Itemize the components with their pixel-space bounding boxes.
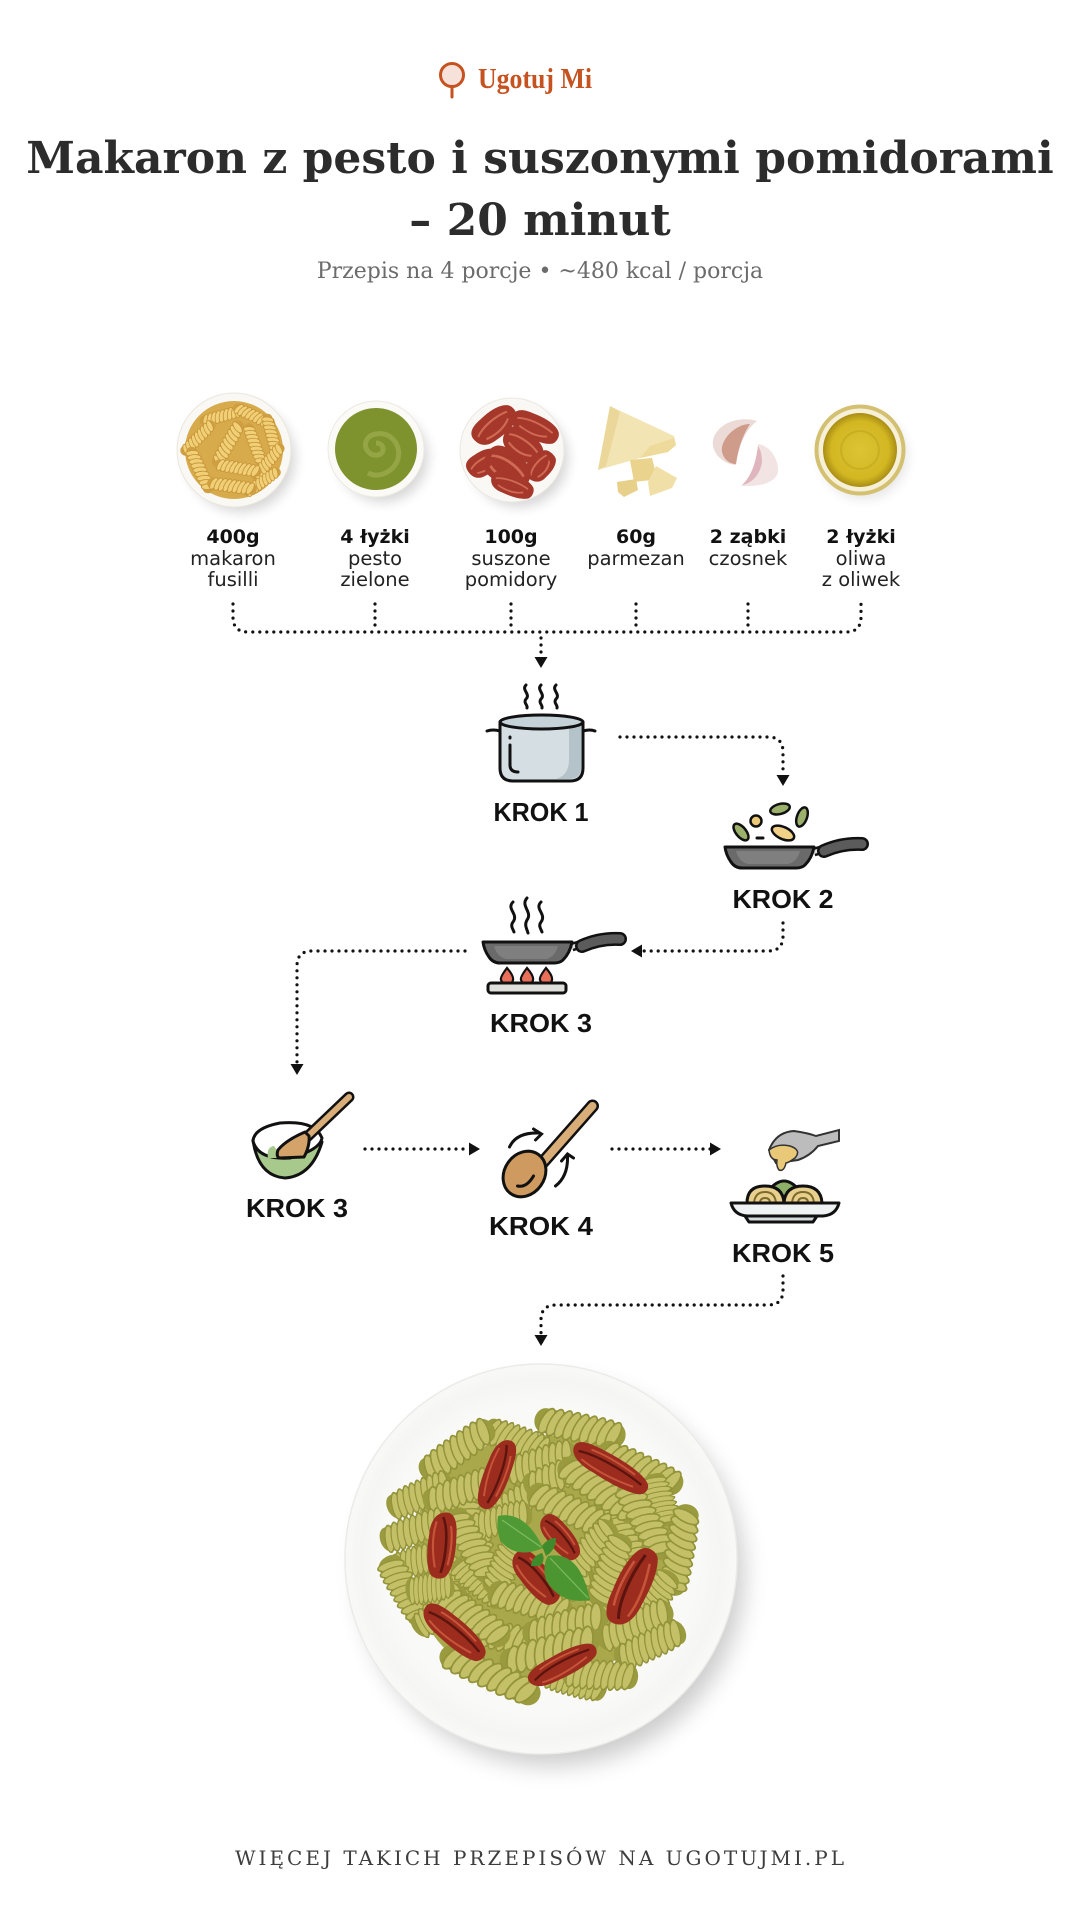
basil leaves bbox=[497, 1515, 590, 1601]
subtitle: Przepis na 4 porcje • ~480 kcal / porcja bbox=[317, 259, 763, 284]
label: 400g makaron fusilli: makaron bbox=[190, 547, 276, 570]
icon: mixing bowl with spoon bbox=[253, 1097, 349, 1178]
label: 100g suszone pomidory: pomidory bbox=[465, 568, 557, 591]
label: 2 łyżki oliwa z oliwek: oliwa bbox=[836, 547, 886, 570]
label: KROK 1: KROK 1 bbox=[494, 797, 588, 827]
panel: ingredients bbox=[177, 393, 907, 591]
arrow: step 1 to step 2 bbox=[620, 737, 790, 786]
arrow: serving to final dish bbox=[534, 1276, 783, 1346]
arrow: ingredients to step 1 bbox=[233, 604, 861, 668]
label: 2 ząbki czosnek: czosnek bbox=[709, 547, 788, 570]
label: 4 łyżki pesto zielone: zielone bbox=[340, 568, 410, 591]
label: 100g suszone pomidory: suszone bbox=[471, 547, 551, 570]
label: KROK 3: KROK 3 bbox=[490, 1008, 592, 1038]
footer: WIĘCEJ TAKICH PRZEPISÓW NA UGOTUJMI.PL bbox=[235, 1845, 847, 1870]
icon: stirring spoon bbox=[494, 1106, 592, 1205]
icon: logo spoon bbox=[440, 64, 464, 97]
ingredient: parmesan bbox=[598, 406, 677, 497]
logo bbox=[440, 64, 592, 97]
ingredient: olive oil bbox=[814, 404, 907, 499]
title: – 20 minut bbox=[409, 195, 671, 246]
ingredient: garlic bbox=[713, 419, 778, 486]
label: 2 łyżki oliwa z oliwek: 2 łyżki bbox=[826, 526, 896, 548]
label: KROK 5: KROK 5 bbox=[732, 1238, 834, 1268]
arrow: bowl to spoon bbox=[365, 1142, 480, 1156]
sun-dried tomatoes bbox=[416, 1436, 665, 1693]
arrow: step 3 to mixing bowl bbox=[290, 951, 465, 1075]
arrow: step 2 to step 3 bbox=[631, 923, 783, 958]
ingredient: fusilli bowl bbox=[177, 393, 295, 512]
label: 60g parmezan: 60g bbox=[616, 526, 656, 548]
logo wordmark: Ugotuj Mi bbox=[478, 64, 592, 95]
pasta bbox=[373, 1403, 704, 1712]
plate bbox=[345, 1364, 737, 1754]
label: 400g makaron fusilli: fusilli bbox=[207, 568, 259, 591]
label: 400g makaron fusilli: 400g bbox=[206, 526, 260, 548]
label: 2 łyżki oliwa z oliwek: z oliwek bbox=[822, 568, 901, 591]
final dish: plate of pesto pasta bbox=[345, 1364, 744, 1766]
label: 100g suszone pomidory: 100g bbox=[484, 526, 538, 548]
label: 60g parmezan: parmezan bbox=[587, 547, 685, 570]
icon: pan on burner bbox=[483, 898, 620, 993]
label: 4 łyżki pesto zielone: 4 łyżki bbox=[340, 526, 410, 548]
label: 2 ząbki czosnek: 2 ząbki bbox=[710, 526, 786, 548]
icon: pan with tossed ingredients bbox=[725, 802, 862, 868]
title: Makaron z pesto i suszonymi pomidorami bbox=[26, 133, 1054, 184]
label: KROK 2: KROK 2 bbox=[732, 884, 834, 914]
plate shadow bbox=[360, 1382, 744, 1766]
label: 4 łyżki pesto zielone: pesto bbox=[348, 547, 402, 570]
ingredient: sun-dried tomatoes bowl bbox=[460, 398, 568, 507]
label: KROK 3 bowl step: KROK 3 bbox=[246, 1193, 348, 1223]
arrow: spoon to serving bbox=[612, 1142, 721, 1156]
ingredient: pesto bowl bbox=[328, 401, 428, 502]
icon: ladle over pasta plate bbox=[731, 1130, 839, 1222]
label: KROK 4: KROK 4 bbox=[489, 1211, 594, 1241]
icon: pot with steam bbox=[487, 685, 595, 781]
